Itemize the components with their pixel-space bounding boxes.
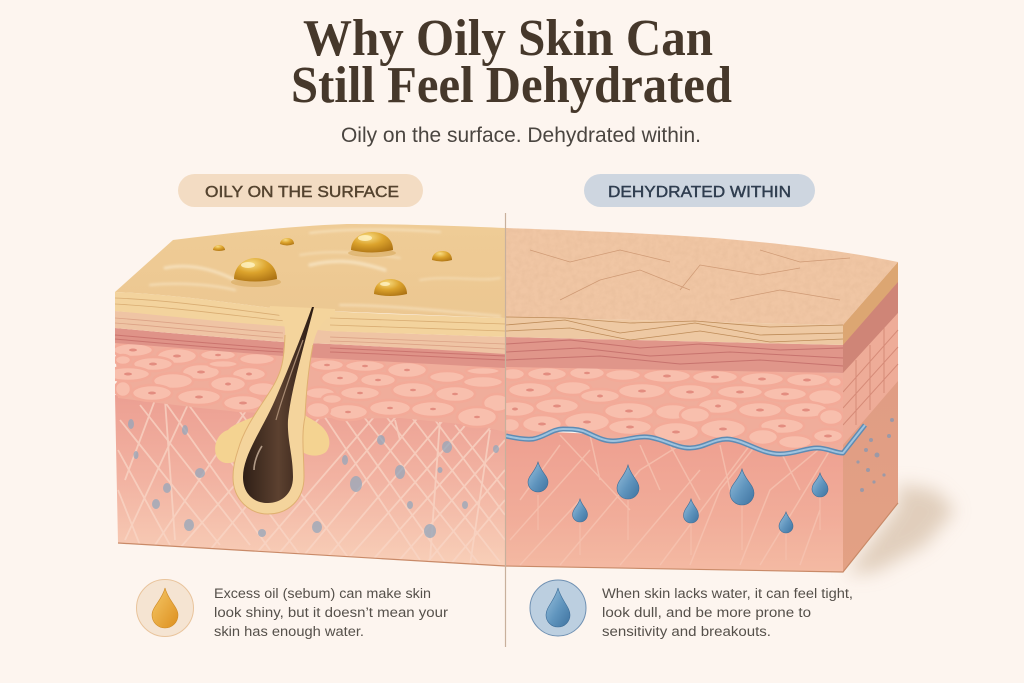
blue moisture barrier line: [506, 425, 865, 454]
panel: left epidermis cells: [106, 342, 511, 432]
pill: dehydrated within: DEHYDRATED WITHIN: [608, 184, 791, 201]
subtitle: Oily on the surface. Dehydrated within.: [341, 124, 701, 147]
skin cross-section block: [106, 224, 955, 574]
panel: right epidermis cells: [495, 365, 843, 454]
caption text: oil: Excess oil (sebum) can make skin: [214, 586, 431, 601]
hair shaft: [243, 307, 314, 503]
oil droplets on surface: [213, 232, 452, 296]
title: [291, 10, 732, 114]
panel: right side face: [843, 262, 898, 572]
panel: oily top surface: [115, 224, 505, 318]
panel: dry top surface: [506, 228, 898, 325]
caption text: oil: [214, 586, 449, 639]
caption: water: [530, 580, 853, 639]
caption text: water: When skin lacks water, it can feel tight,: [602, 586, 853, 601]
panel: left stratum layers: [115, 292, 505, 368]
caption: oil: [136, 580, 449, 639]
pill: oily on the surface: OILY ON THE SURFACE: [205, 184, 399, 201]
icon: hair follicle with sebaceous glands: [215, 306, 335, 514]
dermis blood vessels left: [128, 419, 499, 538]
caption text: water: [602, 586, 853, 639]
pill: dehydrated within: [584, 174, 815, 207]
icon: oil drop: [136, 580, 194, 636]
caption text: water: sensitivity and breakouts.: [602, 624, 771, 639]
water droplets in dermis: [528, 462, 828, 533]
pill: oily on the surface: [178, 174, 423, 207]
panel: right dermis: [506, 430, 843, 572]
caption text: oil: look shiny, but it doesn’t mean your: [214, 605, 449, 620]
sebaceous gland left: [215, 412, 262, 463]
centre divider: [504, 213, 506, 647]
panel: right dry stratum layers: [506, 317, 843, 373]
dermis fibers right: [510, 435, 830, 565]
panel: left dermis: [115, 395, 505, 566]
caption text: water: look dull, and be more prone to: [602, 605, 811, 620]
ground shadow: [846, 484, 955, 574]
follicle sheath: [233, 306, 335, 514]
title: Why Oily Skin Can: [303, 10, 713, 67]
bottom edge: [118, 503, 898, 572]
infographic canvas: [115, 19, 958, 647]
title: Still Feel Dehydrated: [291, 57, 732, 114]
sebaceous gland right: [294, 405, 329, 456]
icon: water drop: [530, 580, 586, 636]
caption text: oil: skin has enough water.: [214, 624, 364, 639]
dermis collagen fibers left: [118, 400, 505, 565]
